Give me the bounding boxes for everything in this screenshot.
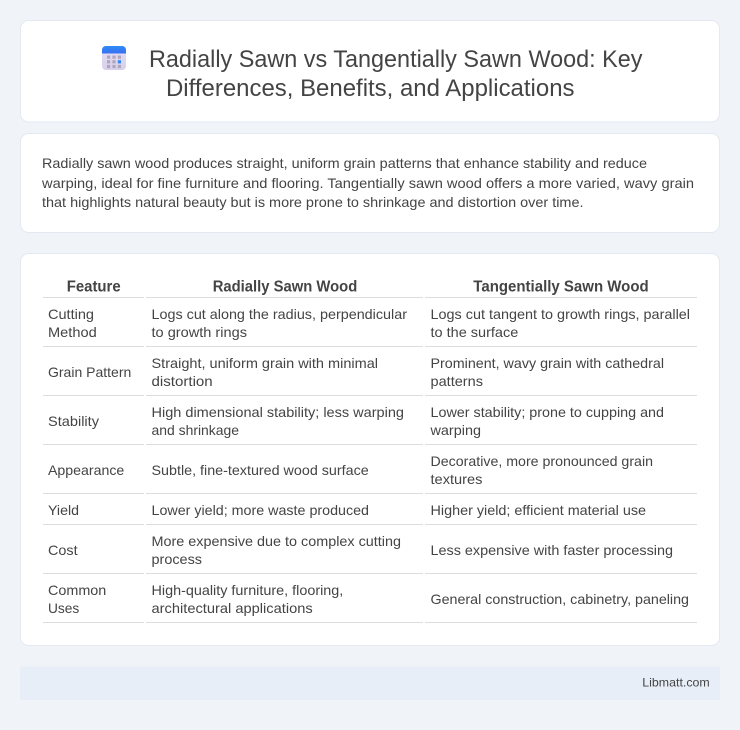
panel: comparison table xyxy=(20,254,720,646)
title: Differences, Benefits, and Applications xyxy=(166,75,574,102)
row: cutting method: Cutting xyxy=(48,306,94,322)
title: Radially Sawn vs Tangentially Sawn Wood: Key xyxy=(149,46,642,73)
icon: calendar xyxy=(102,46,126,70)
row: cutting method: to growth rings xyxy=(152,324,247,340)
row: appearance xyxy=(48,453,653,487)
row: yield: Lower yield; more waste produced xyxy=(152,502,369,518)
row: grain pattern: Prominent, wavy grain with cathedral xyxy=(430,355,664,371)
row: stability xyxy=(48,404,664,438)
intro paragraph xyxy=(41,155,694,210)
row: appearance: Subtle, fine-textured wood surface xyxy=(152,462,369,478)
intro paragraph: that highlights natural beauty but is more prone to shrinkage and distortion over time. xyxy=(42,194,584,210)
row: yield: Yield xyxy=(48,502,79,518)
panel: introduction xyxy=(20,134,720,232)
row: cost: process xyxy=(152,551,202,567)
row: yield xyxy=(48,502,646,518)
row: cutting method: Logs cut tangent to growth rings, parallel xyxy=(430,306,690,322)
row: stability: Lower stability; prone to cupping and xyxy=(430,404,664,420)
row: cost xyxy=(48,533,673,567)
row: grain pattern xyxy=(48,355,664,389)
row: cutting method: to the surface xyxy=(430,324,519,340)
intro paragraph: Radially sawn wood produces straight, uniform grain patterns that enhance stability and reduce xyxy=(42,155,647,171)
row: grain pattern: distortion xyxy=(152,373,213,389)
row: stability: and shrinkage xyxy=(152,422,239,438)
row: common uses: General construction, cabinetry, paneling xyxy=(430,591,689,607)
row: appearance: Appearance xyxy=(48,462,125,478)
footer credit: Libmatt.com xyxy=(642,676,710,690)
row: common uses xyxy=(48,582,689,616)
row: cutting method: Method xyxy=(48,324,97,340)
table header row: Radially Sawn Wood xyxy=(213,278,357,296)
row: grain pattern: Straight, uniform grain with minimal xyxy=(152,355,378,371)
table header row: Tangentially Sawn Wood xyxy=(473,278,649,296)
table header row: Feature xyxy=(67,278,121,296)
panel: title card xyxy=(20,20,720,122)
row: cost: More expensive due to complex cutting xyxy=(152,533,401,549)
row: common uses: architectural applications xyxy=(152,600,313,616)
row: appearance: Decorative, more pronounced grain xyxy=(430,453,653,469)
row: cutting method: Logs cut along the radius, perpendicular xyxy=(152,306,407,322)
row: cost: Cost xyxy=(48,542,78,558)
row: yield: Higher yield; efficient material use xyxy=(430,502,646,518)
row: appearance: textures xyxy=(430,471,482,487)
row: common uses: Common xyxy=(48,582,106,598)
row: cost: Less expensive with faster processing xyxy=(430,542,673,558)
row: common uses: High-quality furniture, flooring, xyxy=(152,582,343,598)
intro paragraph: warping, ideal for fine furniture and flooring. Tangentially sawn wood offers a more varied, wavy grain xyxy=(41,175,694,191)
row: stability: warping xyxy=(429,422,481,438)
row: stability: Stability xyxy=(48,413,99,429)
row: cutting method xyxy=(48,306,690,340)
row: grain pattern: Grain Pattern xyxy=(48,364,131,380)
title xyxy=(149,46,642,102)
row: stability: High dimensional stability; less warping xyxy=(152,404,404,420)
row: grain pattern: patterns xyxy=(430,373,483,389)
table header row xyxy=(67,278,649,296)
row: common uses: Uses xyxy=(48,600,79,616)
footer bar xyxy=(20,666,720,700)
